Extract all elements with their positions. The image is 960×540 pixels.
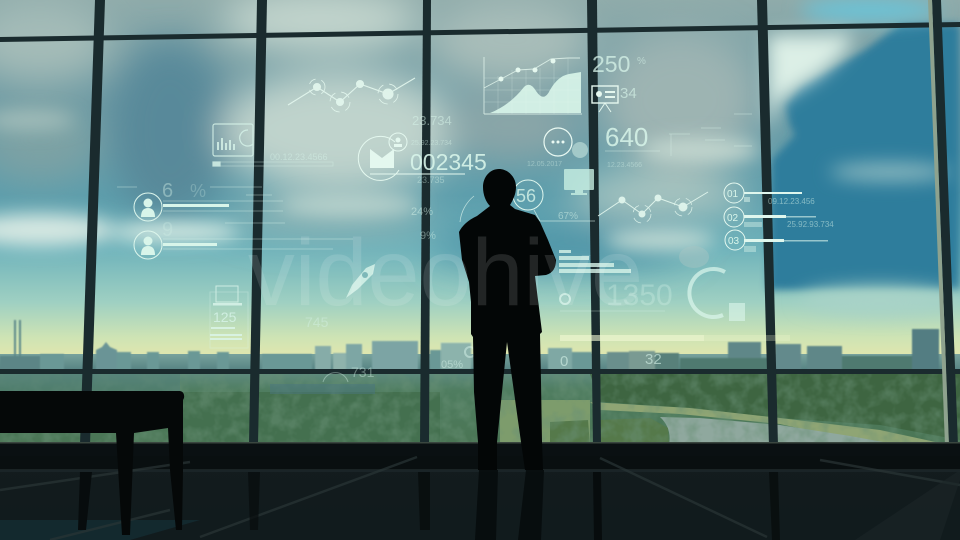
05% widget: 05%: [441, 359, 463, 371]
person rows: 9: [162, 219, 173, 241]
bars and 350: 1350: [606, 279, 673, 312]
sky: [0, 0, 960, 356]
city skyline: [0, 320, 960, 372]
stats 250 34: 34: [620, 85, 637, 102]
circle 56: 56: [516, 186, 536, 206]
stats 250 34: %: [637, 56, 646, 67]
numbered list: 03: [728, 236, 740, 247]
blue sky at right: [768, 24, 960, 290]
timestamp: 00.12.23.4566: [270, 152, 328, 162]
line chart right: [598, 192, 708, 223]
man reflection: [475, 470, 544, 540]
person rows: [117, 180, 353, 259]
numbered list: [724, 183, 834, 252]
circle 56: 67%: [558, 211, 578, 222]
email widget: 25.92.23.734: [411, 140, 452, 147]
email widget: 002345: [410, 149, 487, 175]
infographic overlay: [117, 51, 834, 382]
640 block: [605, 122, 660, 169]
numbered list: 02: [727, 213, 739, 224]
lower left labels: [305, 314, 375, 382]
lower stats: [560, 351, 662, 370]
email widget: 23.735: [417, 175, 445, 185]
chat and monitor: 12.05.2017: [527, 161, 562, 168]
lower stats: 32: [645, 351, 662, 368]
bench: [0, 391, 184, 535]
lower left labels: 731: [351, 364, 375, 380]
640 block: 12.23.4566: [607, 162, 642, 169]
gauge arc and speech bubbles: [679, 246, 745, 321]
floor: [0, 444, 960, 540]
person rows: 6: [162, 180, 173, 202]
email widget: [358, 113, 487, 242]
chart card icon: [213, 124, 333, 166]
stats 250 34: [592, 51, 646, 112]
05% widget: [440, 342, 476, 371]
rocket icon: [346, 264, 375, 298]
stats 250 34: 250: [592, 51, 630, 77]
laptop card: [210, 286, 248, 348]
watermark: videohive: [248, 220, 643, 326]
small tech labels: [669, 114, 752, 156]
numbered list: 01: [727, 189, 739, 200]
numbered list: 25.92.93.734: [787, 220, 834, 229]
chat and monitor: [527, 128, 594, 195]
line chart top: [288, 78, 415, 112]
email widget: 9%: [420, 230, 436, 242]
person rows: %: [190, 181, 206, 201]
numbered list: 09.12.23.456: [768, 197, 815, 206]
640 block: 640: [605, 122, 648, 152]
trees and river: [0, 372, 960, 446]
lower left labels: 745: [305, 314, 329, 330]
email widget: 24%: [411, 206, 433, 218]
man silhouette: [459, 169, 556, 470]
circle 56: [460, 180, 595, 222]
bars and 350: [559, 250, 790, 341]
email widget: 23.734: [412, 113, 452, 128]
laptop card: 125: [213, 309, 237, 325]
area chart: [484, 57, 582, 114]
floor reflections: [0, 455, 960, 540]
lower stats: 0: [560, 353, 568, 370]
